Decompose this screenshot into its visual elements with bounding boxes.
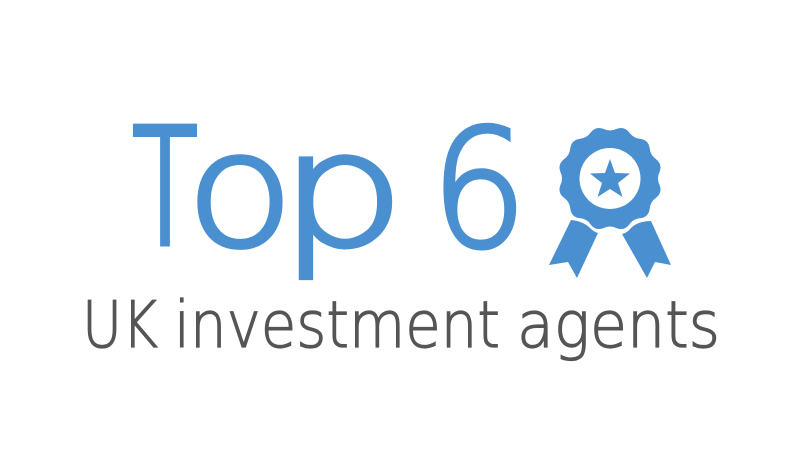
- subtitle: UK investment agents: [82, 289, 720, 363]
- badge inner circle: [580, 148, 640, 209]
- scalloped badge: [559, 128, 661, 229]
- subtitle: UK investment agents: agents: [517, 289, 720, 363]
- subtitle: UK investment agents: K: [122, 289, 158, 363]
- title: Top 6: p: [279, 99, 405, 283]
- title: Top 6: o: [186, 98, 294, 283]
- subtitle: UK investment agents: U: [82, 289, 122, 363]
- subtitle: UK investment agents: investment: [174, 289, 500, 363]
- left ribbon: [549, 220, 598, 278]
- title: Top 6: 6: [431, 96, 527, 285]
- title: Top 6: T: [133, 95, 197, 281]
- title: Top 6: [133, 95, 527, 285]
- right ribbon: [622, 221, 671, 278]
- star: [590, 159, 630, 197]
- icon: award rosette with star: [549, 128, 671, 278]
